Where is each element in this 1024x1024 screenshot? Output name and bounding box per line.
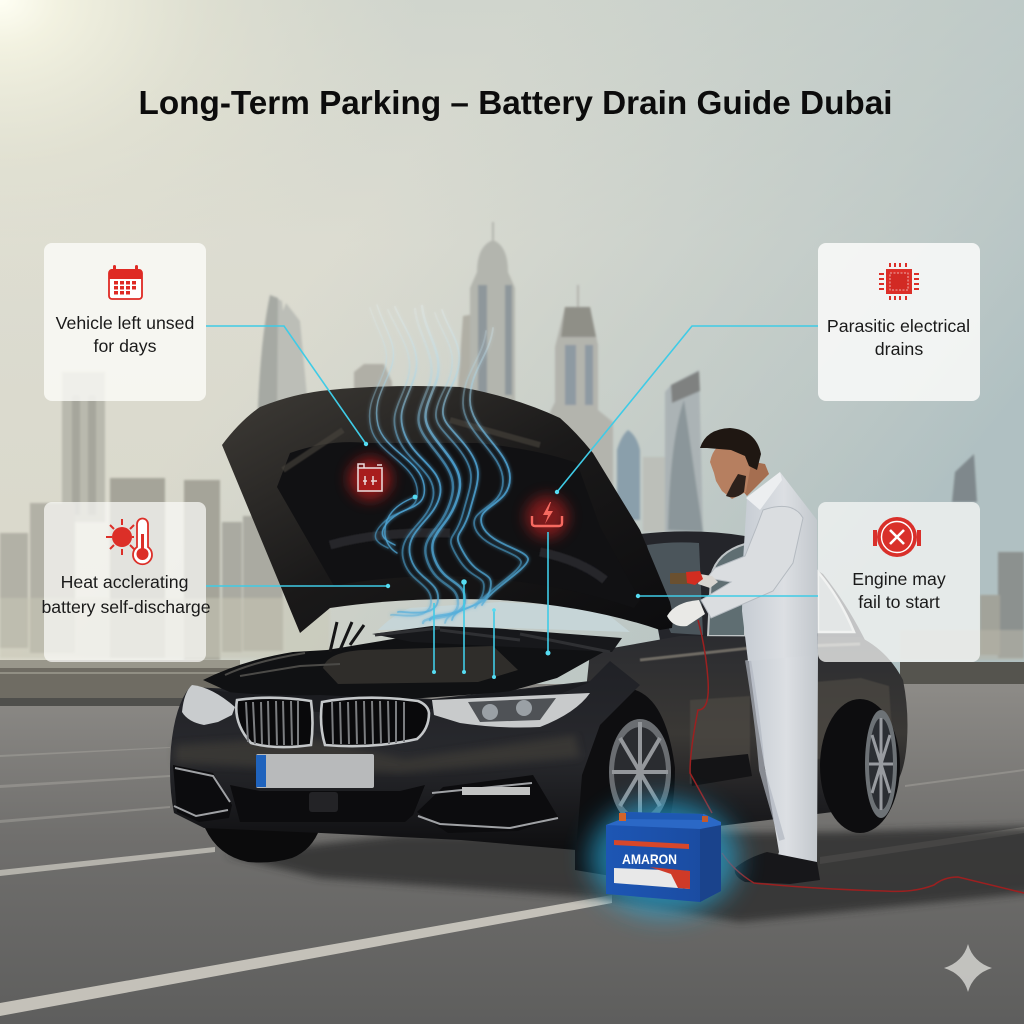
car shadow xyxy=(225,826,1024,922)
card text: Engine may xyxy=(852,569,946,589)
car xyxy=(170,386,908,880)
info card: engine may fail xyxy=(818,502,980,662)
Dubai skyline xyxy=(0,222,1024,660)
icon: calendar xyxy=(109,265,142,299)
side body xyxy=(573,636,908,854)
neck and head xyxy=(700,428,782,510)
forearm and sleeve xyxy=(701,506,803,618)
legs xyxy=(748,653,818,863)
front fascia xyxy=(170,661,640,850)
icon: sun and thermometer xyxy=(106,518,152,564)
battery label: AMARON xyxy=(622,851,677,867)
title: Long-Term Parking – Battery Drain Guide Dubai xyxy=(138,85,892,122)
open hood xyxy=(222,386,673,652)
rear wheel xyxy=(820,699,900,833)
info card: engine may fail: fail to start xyxy=(858,592,940,612)
sparkle watermark xyxy=(944,944,992,992)
icon: microchip xyxy=(879,263,919,300)
background sky xyxy=(0,0,1024,700)
torso xyxy=(742,472,818,661)
connector lines xyxy=(206,326,818,679)
number plate xyxy=(256,754,374,788)
info card: heat: battery self-discharge xyxy=(41,597,211,617)
shoes xyxy=(735,852,820,884)
info card: vehicle left unused xyxy=(44,243,206,401)
card text: Heat acclerating xyxy=(61,572,188,592)
info card: heat xyxy=(41,502,211,662)
windshield and wipers xyxy=(372,602,630,652)
card text: Vehicle left unsed xyxy=(56,313,194,333)
front wheel xyxy=(575,688,675,880)
info card: parasitic drains xyxy=(818,243,980,401)
amaron battery xyxy=(590,800,738,916)
info card: vehicle left unused: for days xyxy=(94,336,157,356)
steam waves xyxy=(370,305,528,623)
gloves xyxy=(667,600,705,626)
parking ground xyxy=(0,660,1024,1024)
icon: electrical warning on hood xyxy=(526,496,568,538)
headlights xyxy=(182,685,590,728)
front-left tyre xyxy=(205,828,320,862)
card text: Parasitic electrical xyxy=(827,316,970,336)
engine bay xyxy=(190,635,607,712)
roof and windows xyxy=(640,531,865,640)
info card: parasitic drains: drains xyxy=(875,339,923,359)
lower bumper xyxy=(173,765,558,833)
test meter clamp xyxy=(670,571,703,585)
grille xyxy=(236,698,429,747)
icon: engine failure xyxy=(873,517,921,557)
icon: battery warning on hood xyxy=(349,458,391,500)
red test lead xyxy=(690,620,1024,893)
mechanic xyxy=(667,428,1024,893)
